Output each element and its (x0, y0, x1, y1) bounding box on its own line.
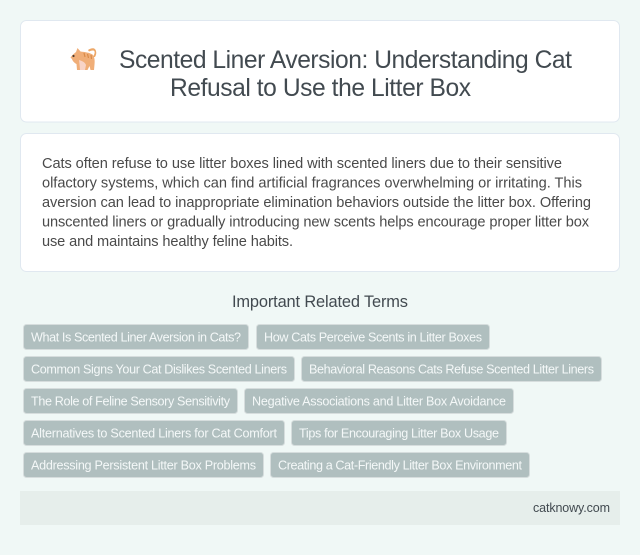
tag (24, 356, 294, 382)
tag (244, 388, 514, 414)
description text: Cats often refuse to use litter boxes lined with scented liners due to their sensitive (42, 156, 562, 172)
tag: Behavioral Reasons Cats Refuse Scented Litter Liners (309, 362, 594, 376)
description text (42, 156, 591, 250)
footer (20, 491, 620, 525)
tag (24, 452, 264, 478)
tag: Tips for Encouraging Litter Box Usage (299, 426, 499, 440)
panel: title card (20, 20, 620, 122)
tag: How Cats Perceive Scents in Litter Boxes (264, 330, 482, 344)
tag (24, 420, 284, 446)
tag (302, 356, 602, 382)
tag: Creating a Cat-Friendly Litter Box Environment (278, 458, 522, 472)
tag: What Is Scented Liner Aversion in Cats? (31, 330, 241, 344)
tag: Addressing Persistent Litter Box Problems (31, 458, 256, 472)
description text: use and maintains healthy feline habits. (42, 234, 293, 250)
heading: related terms: Important Related Terms (232, 293, 408, 311)
footer: catknowy.com (533, 501, 610, 515)
tag: Negative Associations and Litter Box Avoidance (252, 394, 506, 408)
related terms tags (24, 324, 602, 478)
tag: Common Signs Your Cat Dislikes Scented Liners (31, 362, 287, 376)
tag (256, 324, 490, 350)
icon: cat (70, 48, 96, 70)
tag (24, 324, 248, 350)
title: Scented Liner Aversion: Understanding Cat (119, 47, 572, 74)
tag (270, 452, 530, 478)
title: Refusal to Use the Litter Box (170, 75, 472, 102)
panel: description (20, 134, 620, 272)
tag: The Role of Feline Sensory Sensitivity (31, 394, 231, 408)
title (119, 47, 572, 102)
description text: olfactory systems, which can find artificial fragrances overwhelming or irritating. This (42, 176, 582, 192)
description text: aversion can lead to inappropriate elimination behaviors outside the litter box. Offering (42, 195, 591, 211)
tag: Alternatives to Scented Liners for Cat Comfort (31, 426, 278, 440)
description text: unscented liners or gradually introducing new scents helps encourage proper litter box (42, 214, 590, 230)
tag (292, 420, 506, 446)
tag (24, 388, 238, 414)
